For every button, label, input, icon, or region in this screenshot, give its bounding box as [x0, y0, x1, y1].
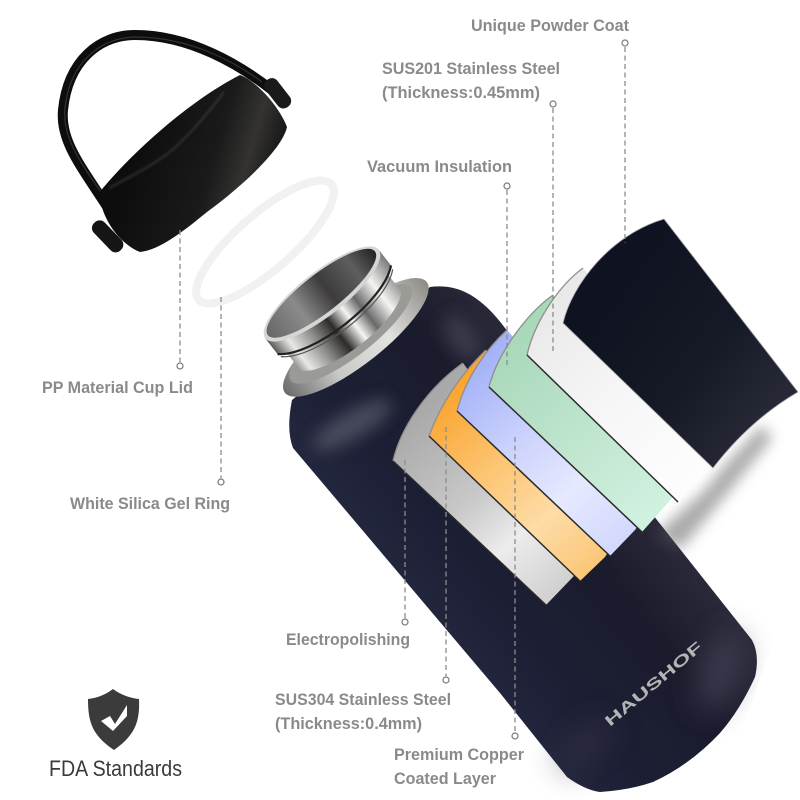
label: SUS201 Stainless Steel: (Thickness:0.45mm): [382, 83, 540, 102]
label: SUS304 Stainless Steel: (Thickness:0.4mm): [275, 714, 422, 733]
layer: electropolished steel: [393, 363, 600, 605]
label: SUS304 Stainless Steel: [275, 690, 451, 733]
leader: copper: [512, 437, 518, 739]
neck wall: [265, 250, 418, 388]
label: Vacuum Insulation: Vacuum Insulation: [367, 157, 512, 176]
leader: SUS201: [550, 101, 556, 353]
bottle body: [289, 286, 757, 792]
leader: silica ring: [218, 297, 224, 485]
label: FDA Standards: FDA Standards: [49, 756, 182, 781]
label: SUS201 Stainless Steel: [382, 59, 560, 102]
bottle steel neck: [238, 221, 443, 414]
leader: powder coat: [622, 40, 628, 243]
logo text: HAUSHOF: [602, 639, 706, 730]
flange: [268, 261, 443, 414]
leader: cup lid: [177, 230, 183, 369]
layer: vacuum insulation: [489, 295, 692, 532]
leader: electropolishing: [402, 460, 408, 625]
soft shadow under layers: [655, 425, 772, 550]
label: Electropolishing: Electropolishing: [286, 630, 410, 649]
leader: SUS304: [443, 427, 449, 683]
label: Premium Copper Coated Layer: Premium Copper: [394, 745, 524, 764]
label: Premium Copper Coated Layer: [394, 745, 524, 788]
rim and interior: [252, 232, 392, 356]
layer: SUS304 stainless edge: [429, 350, 625, 581]
label: SUS201 Stainless Steel: SUS201 Stainless Steel: [382, 59, 560, 78]
icon: black bottle lid with strap: [63, 35, 294, 255]
leader: vacuum insulation: [504, 183, 510, 368]
icon: FDA shield: [88, 689, 139, 750]
label: Unique Powder Coat: Unique Powder Coat: [471, 16, 629, 35]
label: Premium Copper Coated Layer: Coated Layer: [394, 769, 496, 788]
icon: check mark: [101, 705, 127, 731]
label: PP Material Cup Lid: PP Material Cup Lid: [42, 378, 193, 397]
layer: powder coat: [563, 219, 798, 468]
label: White Silica Gel Ring: White Silica Gel Ring: [70, 494, 230, 513]
layer: copper coating edge: [457, 330, 655, 556]
layer: SUS201 stainless steel: [527, 268, 730, 502]
icon: white silica gel ring: [180, 163, 350, 321]
label: SUS304 Stainless Steel: SUS304 Stainless Steel: [275, 690, 451, 709]
